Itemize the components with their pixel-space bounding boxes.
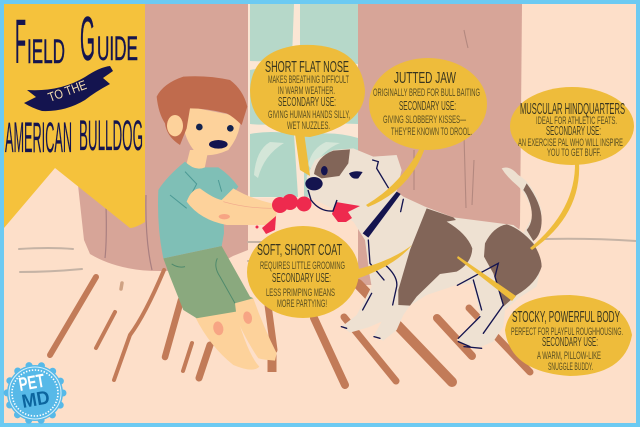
dog body bbox=[307, 148, 542, 349]
dog mouth line bbox=[308, 190, 337, 211]
callout: soft, short coat: MORE PARTYING! bbox=[277, 298, 327, 310]
callout: jutted jaw bbox=[366, 58, 487, 207]
title: american bulldog: AMERICAN bbox=[5, 114, 72, 162]
callout: jutted jaw: JUTTED JAW bbox=[394, 70, 457, 87]
ribbon: to the: TO THE bbox=[46, 77, 89, 105]
title: field guide: G bbox=[80, 5, 95, 74]
callout: jutted jaw: GIVING SLOBBERY KISSES— bbox=[383, 114, 466, 126]
callout: soft, short coat: SOFT, SHORT COAT bbox=[257, 242, 342, 259]
banner bbox=[4, 4, 145, 228]
title: field guide: F bbox=[15, 8, 26, 77]
callout: jutted jaw: ORIGINALLY BRED FOR BULL BAITING bbox=[373, 87, 480, 99]
dog bbox=[305, 148, 542, 349]
callout: short flat nose: SHORT FLAT NOSE bbox=[265, 59, 349, 76]
title: american bulldog bbox=[5, 112, 143, 162]
ribbon: to the bbox=[24, 66, 113, 111]
title: field guide: UIDE bbox=[97, 30, 138, 68]
boy's arms bbox=[187, 188, 277, 225]
logo: petmd badge bbox=[7, 365, 63, 421]
callout: short flat nose: SECONDARY USE: bbox=[278, 94, 336, 109]
callout: soft, short coat bbox=[247, 226, 412, 318]
dog nose bbox=[305, 177, 323, 190]
boy's neck bbox=[187, 150, 208, 175]
boy's mouth bbox=[209, 140, 228, 149]
callout: soft, short coat: SECONDARY USE: bbox=[272, 270, 331, 285]
callout: short flat nose: GIVING HUMAN HANDS SILLY, bbox=[268, 109, 350, 121]
boy's ear bbox=[167, 115, 183, 136]
dog face and body lines bbox=[341, 160, 503, 348]
callout: short flat nose: MAKES BREATHING DIFFICULT bbox=[268, 74, 349, 86]
dog tail bbox=[502, 167, 542, 242]
dog eyes bbox=[321, 166, 363, 179]
boy bbox=[157, 76, 277, 370]
text: BULLDOG bbox=[79, 112, 143, 160]
logo: petmd badge: MD bbox=[20, 387, 51, 413]
boy's hair bbox=[157, 76, 247, 145]
floor planks bbox=[50, 270, 530, 385]
boy's eyes bbox=[196, 124, 203, 130]
callout: soft, short coat: REQUIRES LITTLE GROOMING bbox=[260, 260, 345, 272]
callout: jutted jaw: THEY'RE KNOWN TO DROOL. bbox=[391, 126, 472, 138]
dog collar bbox=[363, 192, 401, 238]
dog brown patches bbox=[314, 149, 542, 307]
callout: jutted jaw: SECONDARY USE: bbox=[399, 98, 456, 113]
title: field guide: IELD bbox=[27, 33, 65, 71]
callout: short flat nose bbox=[250, 45, 365, 176]
callout: muscular hindquarters bbox=[510, 87, 634, 250]
boy's legs bbox=[195, 298, 277, 370]
boy's head bbox=[183, 107, 240, 155]
callout: short flat nose: WET NUZZLES. bbox=[287, 120, 330, 132]
boy's shorts bbox=[163, 246, 253, 318]
logo: petmd badge: PET bbox=[17, 371, 47, 396]
baseboard lines bbox=[19, 239, 636, 272]
right curtain bbox=[358, 4, 522, 285]
red rope toy bbox=[256, 194, 360, 234]
callout: soft, short coat: LESS PRIMPING MEANS bbox=[266, 287, 335, 299]
callout: short flat nose: IN WARM WEATHER. bbox=[278, 85, 335, 97]
callout: stocky, powerful body bbox=[457, 256, 632, 376]
boy's shirt bbox=[158, 162, 238, 258]
left curtain bbox=[78, 4, 248, 271]
title: field guide bbox=[15, 5, 138, 77]
window bbox=[248, 4, 358, 198]
